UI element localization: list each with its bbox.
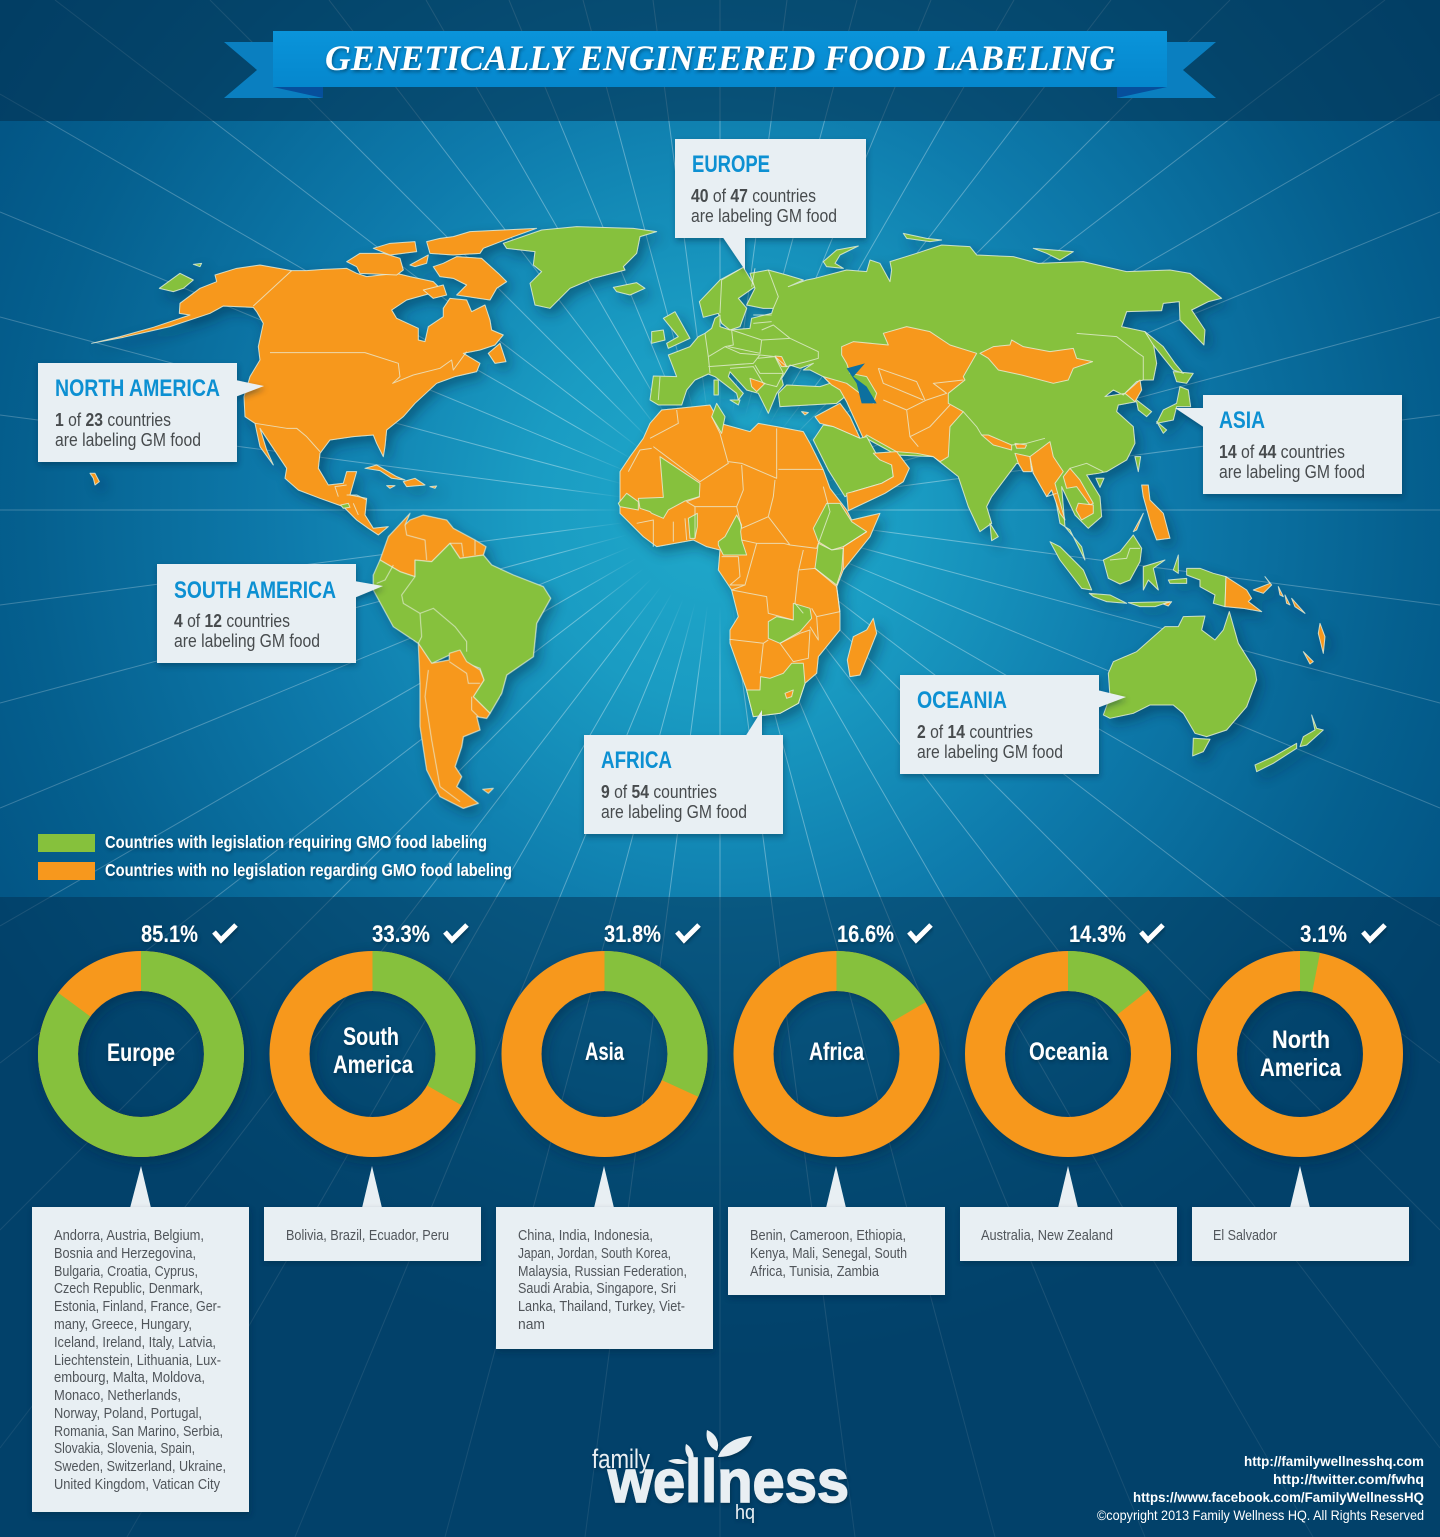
callout: South America: 4 of 12 countries: [174, 611, 290, 631]
list: Europe: embourg, Malta, Moldova,: [54, 1370, 205, 1386]
footer links: http://twitter.com/fwhq: [1273, 1471, 1424, 1487]
mainland: [92, 265, 503, 535]
callout: North America: 1 of 23 countries: [55, 410, 171, 430]
Moldova and Balkans: [750, 356, 787, 392]
Sakhalin and Japan: [1145, 332, 1193, 433]
map: Greenland and Iceland: [503, 227, 657, 308]
Laos: [1063, 468, 1093, 505]
El Salvador: [341, 503, 350, 508]
list: South America: Bolivia, Brazil, Ecuador, Peru: [286, 1228, 449, 1244]
Tunisia: [712, 403, 725, 433]
callout: South America: [157, 564, 383, 663]
callout: Asia: ASIA: [1219, 407, 1265, 434]
logo: Family Wellness HQ: wellness: [607, 1448, 849, 1515]
list: Asia: China, India, Indonesia,: [518, 1228, 653, 1244]
Ethiopia: [813, 503, 867, 550]
donut: Asia: 31.8%: [604, 921, 661, 948]
callout: North America: NORTH AMERICA: [55, 375, 220, 402]
Arctic islands: [347, 228, 537, 363]
list: Asia: Lanka, Thailand, Turkey, Viet-: [518, 1299, 685, 1315]
list: South America: [264, 1166, 481, 1261]
donut: Asia: [522, 921, 699, 1137]
list: Europe: Andorra, Austria, Belgium,: [54, 1228, 204, 1244]
Sumatra: [1050, 542, 1092, 590]
list: Europe: Czech Republic, Denmark,: [54, 1281, 203, 1297]
New Zealand: [1255, 715, 1323, 772]
footer links: [1097, 1453, 1424, 1523]
title banner: [224, 31, 1216, 98]
North Korea: [1125, 380, 1142, 402]
footer links: http://familywellnesshq.com: [1244, 1453, 1424, 1469]
list: Europe: Bosnia and Herzegovina,: [54, 1246, 196, 1262]
callout: Europe: [675, 139, 866, 270]
footer links: https://www.facebook.com/FamilyWellnessHQ: [1133, 1489, 1424, 1505]
donut: Africa: [754, 921, 931, 1137]
Taiwan, Hainan, Sri Lanka: [990, 457, 1141, 541]
donut: North America: America: [1260, 1054, 1342, 1082]
Greenland: [503, 227, 657, 308]
callout: South America: are labeling GM food: [174, 631, 320, 651]
list: Asia: nam: [518, 1317, 545, 1333]
donut: North America: North: [1272, 1026, 1330, 1054]
callout: Asia: 14 of 44 countries: [1219, 442, 1345, 462]
callout: Africa: [584, 710, 783, 834]
list: Africa: Benin, Cameroon, Ethiopia,: [750, 1228, 906, 1244]
legend: Countries with legislation requiring GMO food labeling: [105, 832, 487, 852]
Caspian Sea: [847, 363, 877, 403]
callout: South America: SOUTH AMERICA: [174, 577, 336, 604]
Lesotho: [785, 690, 793, 698]
list: Asia: [496, 1166, 713, 1349]
list: Europe: Slovakia, Slovenia, Spain,: [54, 1441, 195, 1457]
Bangladesh: [1015, 453, 1032, 472]
list: Africa: Kenya, Mali, Senegal, South: [750, 1246, 907, 1262]
map: Southeast Asia and Oceania: [1050, 535, 1325, 772]
West New Guinea: [1187, 568, 1226, 607]
Myanmar: [1030, 442, 1065, 520]
callout: North America: [38, 363, 264, 462]
donut: Oceania: Oceania: [1029, 1038, 1109, 1066]
Iraq, Syria, Jordan: [802, 403, 860, 438]
donut: Oceania: 14.3%: [1069, 921, 1126, 948]
callout: Europe: 40 of 47 countries: [691, 186, 816, 206]
legend: Countries with no legislation regarding GMO food labeling: [105, 860, 512, 880]
title: GENETICALLY ENGINEERED FOOD LABELING: [325, 38, 1115, 78]
donut: North America: [1217, 921, 1385, 1137]
Eurasia base: [650, 245, 1222, 560]
callout: Africa: 9 of 54 countries: [601, 782, 717, 802]
Mongolia: [980, 340, 1093, 383]
Sulawesi and Moluccas: [1143, 555, 1187, 590]
Yemen and Oman: [847, 452, 909, 511]
list: Europe: Romania, San Marino, Serbia,: [54, 1424, 223, 1440]
logo: Family Wellness HQ: [592, 1430, 849, 1524]
Timor: [1163, 602, 1172, 606]
callout: North America: are labeling GM food: [55, 430, 201, 450]
donut: Europe: 85.1%: [141, 921, 198, 948]
list: Europe: Liechtenstein, Lithuania, Lux-: [54, 1353, 221, 1369]
world map: [90, 227, 1325, 808]
leaves: [668, 1430, 752, 1464]
callout: Asia: [1175, 395, 1402, 494]
donut: North America: 3.1%: [1300, 921, 1347, 948]
Kenya: [815, 543, 843, 585]
Senegal: [618, 493, 638, 510]
list: Asia: Saudi Arabia, Singapore, Sri: [518, 1281, 676, 1297]
callout: Africa: AFRICA: [601, 747, 672, 774]
list: Europe: Estonia, Finland, France, Ger-: [54, 1299, 221, 1315]
list: Oceania: Australia, New Zealand: [981, 1228, 1113, 1244]
Madagascar: [847, 618, 877, 677]
Borneo: [1103, 535, 1142, 584]
callout: Africa: are labeling GM food: [601, 802, 747, 822]
callout: Oceania: OCEANIA: [917, 687, 1007, 714]
Tasmania: [1193, 738, 1210, 756]
South Africa: [747, 663, 805, 717]
Southern Cone: [418, 643, 493, 808]
list: Oceania: [960, 1166, 1177, 1261]
Saudi Arabia: [813, 425, 893, 497]
Ireland: [652, 330, 665, 343]
Cameroon: [718, 515, 747, 555]
donut: Africa: 16.6%: [837, 921, 894, 948]
Central Asia, Iran, Pakistan: [823, 327, 977, 462]
donut: South America: America: [333, 1051, 414, 1079]
list: Europe: Monaco, Netherlands,: [54, 1388, 181, 1404]
donut: Europe: Europe: [107, 1039, 175, 1067]
map: Eurasia: [650, 233, 1222, 560]
logo: Family Wellness HQ: hq: [735, 1502, 755, 1524]
donut: Europe: [58, 921, 236, 1137]
northern countries: [380, 513, 486, 577]
map: North America: [90, 228, 537, 535]
Mali: [638, 457, 700, 518]
Australia: [1103, 612, 1257, 737]
United Kingdom: [663, 312, 690, 348]
list: Asia: Malaysia, Russian Federation,: [518, 1264, 687, 1280]
legend: [38, 832, 512, 880]
list: Asia: Japan, Jordan, South Korea,: [518, 1246, 671, 1262]
map: South America: [373, 513, 551, 808]
Java and Lesser Sunda: [1089, 593, 1170, 607]
list: Europe: Norway, Poland, Portugal,: [54, 1406, 202, 1422]
callout: Oceania: 2 of 14 countries: [917, 722, 1033, 742]
Sweden and Norway: [699, 267, 755, 330]
Ecuador, Peru, Brazil, Bolivia: [373, 543, 551, 713]
list: Africa: [728, 1166, 945, 1295]
callout: Oceania: [900, 675, 1126, 774]
list: Europe: [32, 1166, 249, 1512]
list: Europe: United Kingdom, Vatican City: [54, 1477, 221, 1493]
donut: Oceania: [985, 921, 1163, 1137]
Philippines: [1133, 485, 1170, 540]
Papua New Guinea and Pacific islands: [1225, 577, 1325, 664]
list: Europe: Bulgaria, Croatia, Cyprus,: [54, 1264, 198, 1280]
Cambodia: [1076, 503, 1093, 520]
donut: South America: [290, 921, 467, 1137]
list: Europe: many, Greece, Hungary,: [54, 1317, 192, 1333]
callout: Europe: are labeling GM food: [691, 206, 837, 226]
list: Europe: Iceland, Ireland, Italy, Latvia,: [54, 1335, 216, 1351]
map: Africa: [618, 403, 880, 717]
donut: Asia: Asia: [585, 1038, 625, 1066]
list: Europe: Sweden, Switzerland, Ukraine,: [54, 1459, 226, 1475]
list: North America: [1192, 1166, 1409, 1261]
Benin: [688, 513, 697, 538]
callout: Europe: EUROPE: [692, 151, 770, 178]
donut: South America: 33.3%: [372, 921, 430, 948]
Chukotka: [159, 263, 202, 292]
donut: South America: South: [343, 1023, 399, 1051]
callout: Oceania: are labeling GM food: [917, 742, 1063, 762]
Novaya Zemlya: [823, 233, 1073, 268]
logo: Family Wellness HQ: family: [592, 1444, 650, 1474]
Iceland: [613, 283, 645, 295]
list: Africa: Africa, Tunisia, Zambia: [750, 1264, 880, 1280]
list: North America: El Salvador: [1213, 1228, 1277, 1244]
callout: Asia: are labeling GM food: [1219, 462, 1365, 482]
Zambia: [768, 603, 812, 643]
donut: Africa: Africa: [809, 1038, 865, 1066]
Mediterranean islands: [714, 380, 740, 405]
Caribbean and Hawaii: [90, 465, 437, 488]
Africa base: [620, 405, 880, 717]
Nepal and Bhutan: [982, 435, 1027, 450]
